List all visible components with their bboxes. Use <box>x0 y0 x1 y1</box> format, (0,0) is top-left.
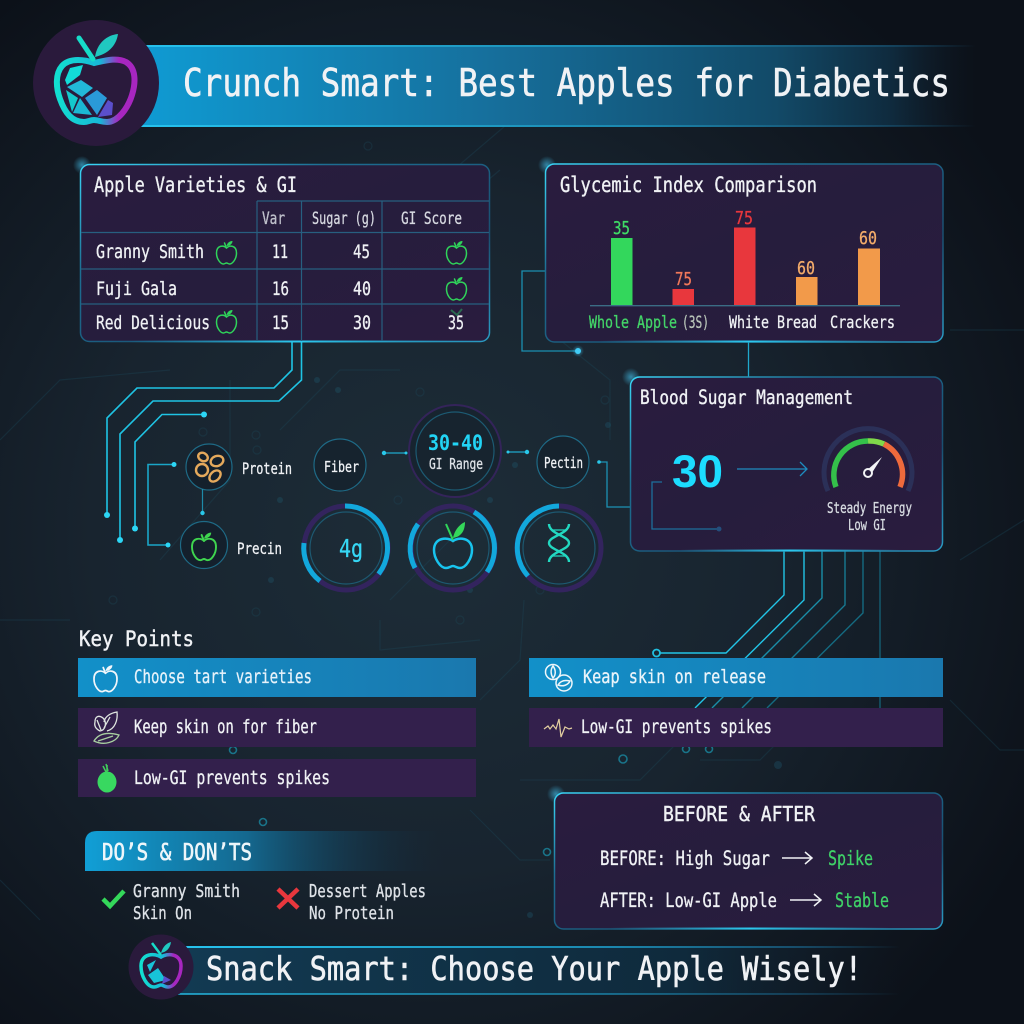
node: precin <box>180 522 282 568</box>
bar chart: 35 <box>613 219 630 239</box>
panel: apple varieties table: 40 <box>353 278 371 300</box>
banner: do's and don'ts <box>85 831 445 871</box>
panel: apple varieties table: 15 <box>272 312 289 334</box>
bar chart: 75 <box>735 209 753 229</box>
key point: low-GI prevents spikes: Low-GI prevents spikes <box>134 767 330 789</box>
bar chart: Whole Apple <box>589 313 677 333</box>
don't list: Dessert Apples <box>309 881 426 902</box>
don't list <box>278 881 426 924</box>
panel: apple varieties table: 35 <box>448 312 464 334</box>
panel: before and after: BEFORE: High Sugar <box>600 847 770 870</box>
table heading: Apple Varieties & GI <box>94 173 297 197</box>
banner: do's and don'ts: DO’S & DON’TS <box>102 840 252 866</box>
panel: apple varieties table: 30 <box>353 312 371 334</box>
panel: before and after: Stable <box>835 889 889 912</box>
node: GI range: GI Range <box>429 455 483 473</box>
logo: apple badge <box>33 20 159 146</box>
node: GI range <box>409 405 501 497</box>
footer logo <box>128 934 194 1000</box>
circuit connector: table to nodes <box>104 342 302 548</box>
node: fiber: Fiber <box>324 458 359 476</box>
panel: apple varieties table: GI Score <box>401 209 462 229</box>
key point: keap skin on release: Keap skin on release <box>583 666 766 688</box>
key point: keap skin on release <box>529 658 943 697</box>
panel: apple varieties table: Var <box>262 209 285 229</box>
key point: low-GI prevents spikes right <box>529 708 943 747</box>
panel: before and after: BEFORE & AFTER <box>663 802 816 826</box>
panel: apple varieties table: 16 <box>272 278 289 300</box>
ring: apple <box>410 506 495 590</box>
panel: apple varieties table: Granny Smith <box>96 241 204 263</box>
nodes cluster <box>180 405 630 590</box>
gauge: Low GI <box>848 516 886 534</box>
panel heading: Blood Sugar Management <box>640 386 853 409</box>
bar chart: 60 <box>859 229 877 249</box>
key point: low-GI prevents spikes right: Low-GI prevents spikes <box>581 716 772 738</box>
ring: dna <box>517 506 601 590</box>
key point: keep skin on for fiber: Keep skin on for fiber <box>134 716 317 738</box>
bar chart <box>589 209 900 333</box>
circuit connector: blood sugar to right bars <box>653 551 880 708</box>
panel: apple varieties table <box>73 156 490 342</box>
panel: apple varieties table: Red Delicious <box>96 312 210 334</box>
panel: before and after: Spike <box>828 847 873 870</box>
bar chart: (3S) <box>682 313 709 333</box>
section heading: key points: Key Points <box>79 627 194 652</box>
panel: before and after <box>547 785 942 930</box>
do list: Skin On <box>133 903 192 924</box>
node: protein <box>186 444 292 490</box>
bar chart: White Bread <box>729 313 817 333</box>
circuit connector: comparison panel to node <box>522 269 584 357</box>
bar chart: Crackers <box>830 313 895 333</box>
footer banner: Snack Smart: Choose Your Apple Wisely! <box>206 949 862 988</box>
node: pectin <box>537 436 589 488</box>
panel: apple varieties table: 11 <box>272 241 288 263</box>
bar chart: 60 <box>797 259 815 279</box>
key point: choose tart varieties: Choose tart varieties <box>134 666 312 688</box>
header banner <box>140 45 976 127</box>
panel: glycemic index comparison <box>538 156 943 342</box>
ring: 4g: 4g <box>339 534 363 563</box>
panel: apple varieties table: Fuji Gala <box>96 278 177 300</box>
big number: 30 <box>672 446 723 497</box>
key point: choose tart varieties <box>78 658 476 697</box>
node: pectin: Pectin <box>544 454 583 472</box>
panel: apple varieties table: 45 <box>353 241 370 263</box>
bar chart: 75 <box>675 270 692 290</box>
do list <box>103 881 240 924</box>
node: fiber <box>314 439 366 491</box>
panel: before and after: AFTER: Low-GI Apple <box>600 889 777 912</box>
node: precin: Precin <box>237 539 282 558</box>
node: GI range: 30-40 <box>428 431 483 455</box>
panel: blood sugar management <box>622 368 942 552</box>
connector: comparison to blood sugar <box>748 342 750 377</box>
gauge: Steady Energy <box>827 499 912 517</box>
don't list: No Protein <box>309 903 394 924</box>
gauge <box>824 429 912 534</box>
panel: apple varieties table: Sugar (g) <box>312 209 376 229</box>
key point: keep skin on for fiber <box>78 708 476 747</box>
key point: low-GI prevents spikes <box>78 759 476 797</box>
ring: 4g <box>304 506 388 590</box>
do list: Granny Smith <box>133 881 240 902</box>
chart heading: Glycemic Index Comparison <box>560 173 817 197</box>
node: protein: Protein <box>242 459 292 478</box>
arrow <box>737 462 807 476</box>
